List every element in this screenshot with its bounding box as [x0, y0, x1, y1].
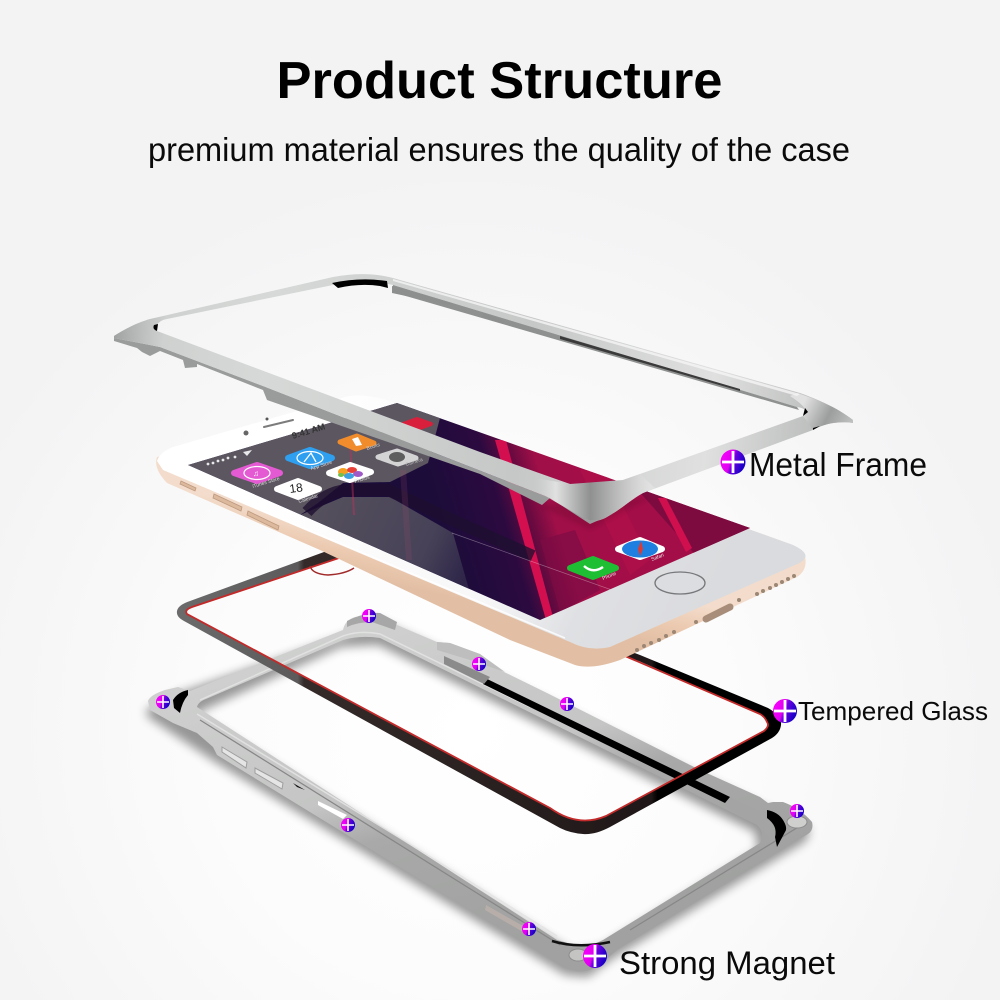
right tip — [790, 393, 853, 430]
subtitle: premium material ensures the quality of the case — [148, 131, 850, 168]
charging port — [706, 607, 730, 619]
inner wall of top rail — [392, 285, 799, 410]
side buttons — [222, 747, 283, 789]
callout marker: strong magnet — [583, 944, 607, 968]
red inner edge — [186, 556, 768, 820]
phone screen — [180, 395, 760, 625]
app icon: Photos — [329, 465, 371, 485]
app icon: App Store: App Store — [310, 460, 333, 472]
app icon: Phone: Phone — [602, 571, 617, 582]
side slot — [318, 801, 347, 819]
small black corners — [153, 324, 820, 430]
app icon: iTunes Store: ♫ — [253, 469, 259, 478]
red notch — [310, 566, 354, 575]
app icon: iTunes Store: iTunes Store — [252, 476, 281, 490]
black notch — [332, 279, 388, 288]
app icon: iTunes Store — [234, 465, 281, 490]
label: tempered glass: Tempered Glass — [798, 696, 988, 726]
side black mark — [293, 783, 305, 790]
phone front face — [157, 395, 806, 649]
frame corner shading — [535, 474, 655, 521]
callout marker: tempered glass — [773, 699, 797, 723]
magnet: right corner — [787, 816, 807, 828]
app icon: Calendar — [277, 480, 319, 505]
callout marker: metal frame — [720, 450, 746, 474]
app icon: Safari — [618, 540, 665, 563]
app icon: Camera — [378, 451, 424, 468]
top surface — [114, 274, 853, 521]
app icon: Calendar: Calendar — [298, 493, 319, 505]
magnet strip: top right arm — [483, 677, 730, 803]
wallpaper stripes — [495, 440, 553, 620]
side switch and volume buttons — [180, 481, 279, 530]
app icon: App Store — [288, 450, 333, 472]
lower grey area — [300, 497, 469, 589]
inner tabs — [392, 286, 505, 324]
grey home area — [188, 403, 440, 515]
magnet slot: right — [767, 810, 786, 847]
magnet slot: bottom — [552, 941, 610, 945]
home indicator: earpiece and camera — [244, 430, 248, 436]
status bar: 9:41 AM — [291, 421, 326, 441]
small magnet markers — [156, 609, 804, 936]
magnet slot: left — [173, 690, 188, 713]
app icon: Camera: Camera — [405, 457, 424, 468]
app icon: Phone — [570, 559, 617, 582]
faint pink stripes — [350, 449, 355, 515]
home button — [655, 572, 705, 594]
app icon: Safari: Safari — [651, 552, 665, 563]
ghost bezel band — [307, 490, 533, 556]
speaker holes — [635, 574, 796, 652]
label: metal frame: Metal Frame — [749, 446, 927, 483]
magnet: bottom corner — [569, 949, 587, 961]
label: strong magnet: Strong Magnet — [619, 945, 835, 981]
app icon: top red — [403, 419, 431, 429]
app icon: Photos: Photos — [354, 474, 371, 485]
app icon: Books — [340, 436, 381, 452]
phone — [156, 395, 806, 667]
title: Product Structure — [276, 52, 722, 110]
bottom insert — [485, 905, 530, 936]
metal frame — [114, 274, 853, 530]
app icon: Books: Books — [366, 442, 381, 452]
left tip — [114, 319, 165, 346]
lower lip and tabs — [114, 338, 613, 524]
app icon: Calendar: 18 — [288, 480, 304, 496]
tempered glass — [177, 547, 781, 834]
strong magnet frame — [146, 613, 812, 977]
